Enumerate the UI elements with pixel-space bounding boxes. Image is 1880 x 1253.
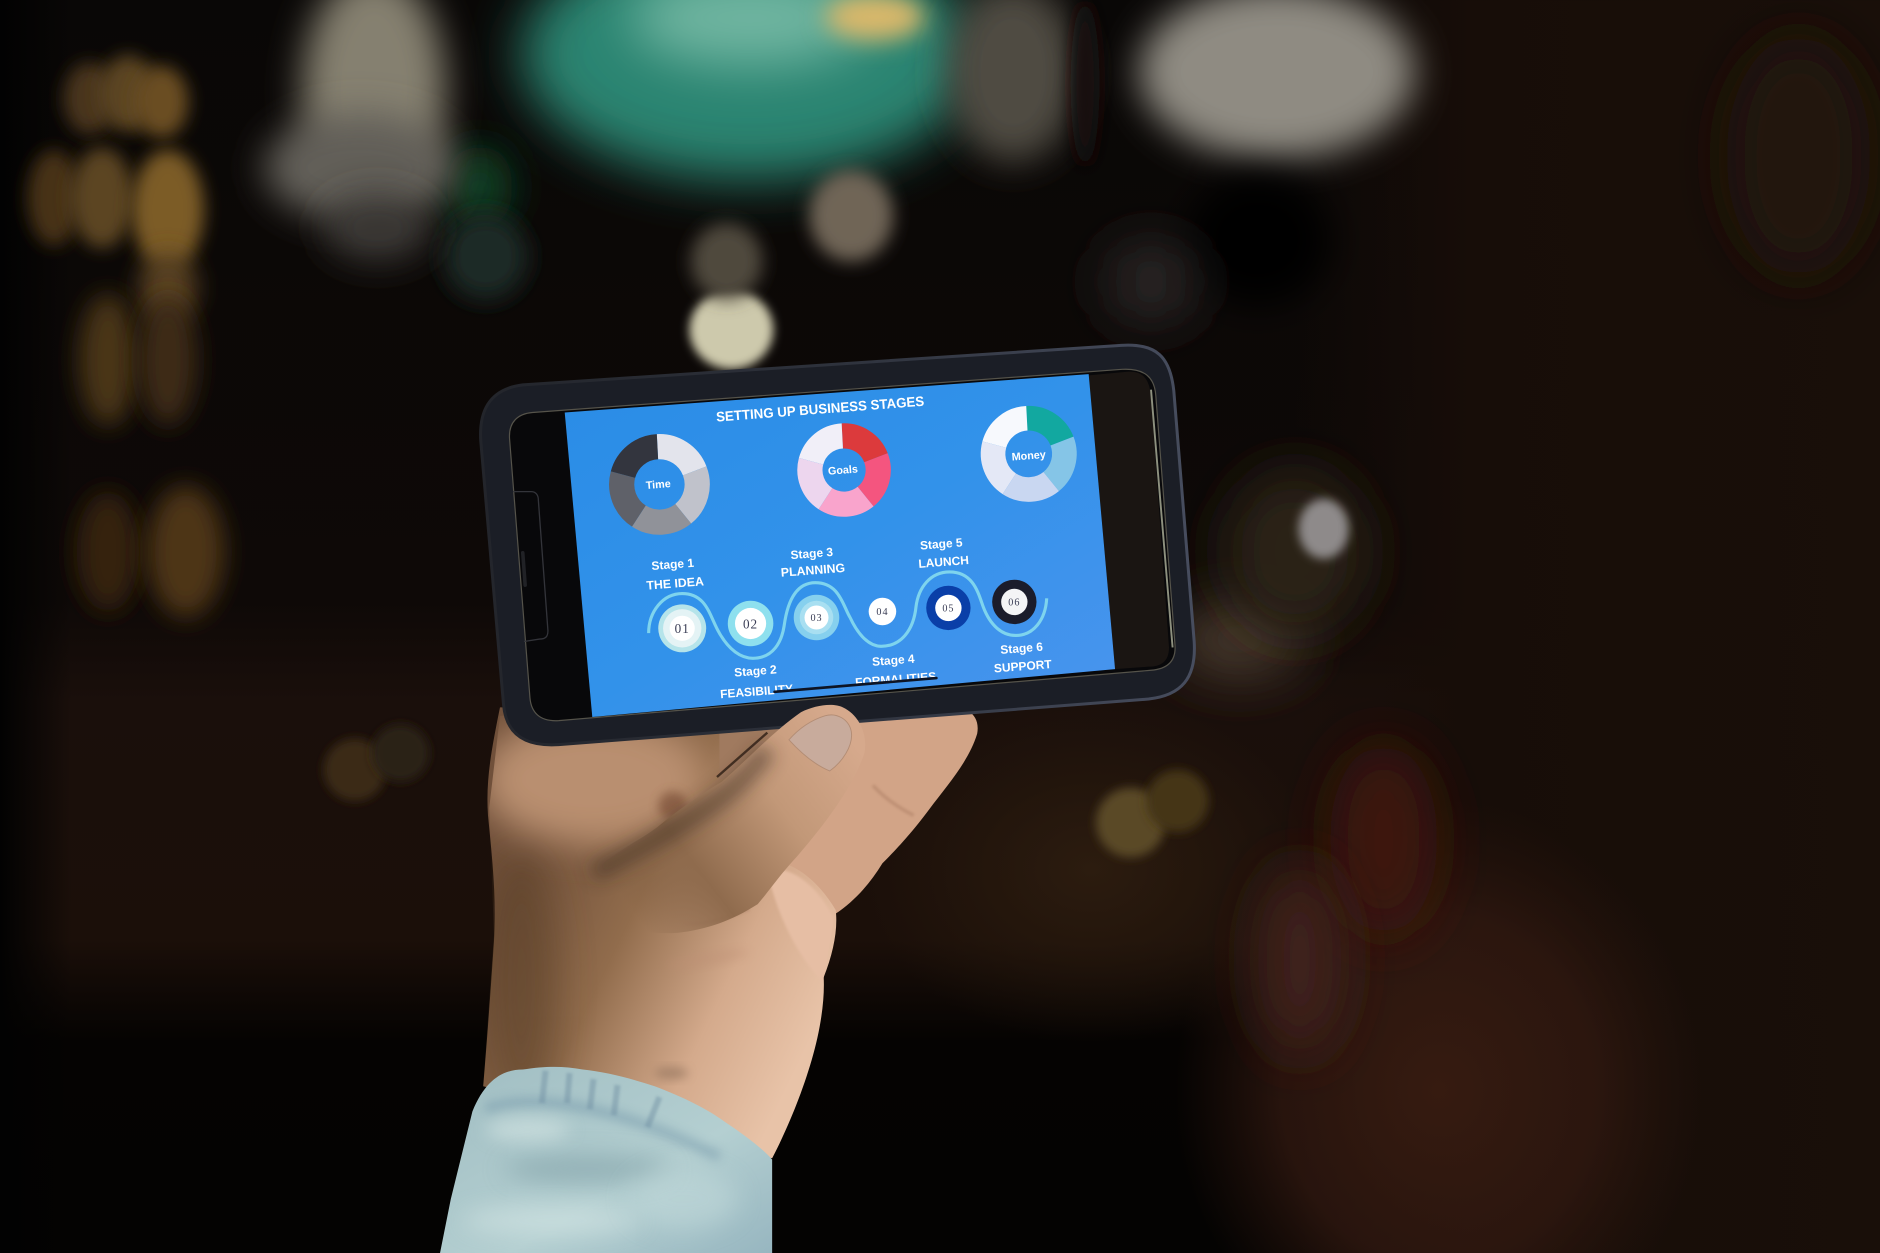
donut chart: time	[622, 447, 697, 522]
stage 01 marker	[658, 604, 706, 652]
label: stage 2: FEASIBILITY	[720, 682, 794, 701]
stage 02 marker	[728, 601, 773, 646]
label: stage 1	[646, 556, 704, 593]
donut chart: goals	[810, 436, 878, 504]
label: stage 5	[918, 535, 969, 571]
label: stage 4: Stage 4	[872, 652, 915, 669]
label: stage 4: FORMALITIES	[855, 669, 937, 690]
stage 05 marker: 05	[942, 604, 954, 615]
stage 05 marker	[926, 586, 971, 630]
phone case	[481, 345, 1194, 745]
label: stage 5: LAUNCH	[918, 553, 969, 571]
screen	[565, 374, 1115, 717]
phone glass	[509, 369, 1175, 721]
hand shading	[486, 716, 827, 1083]
stage 03 marker: 03	[810, 613, 823, 624]
stage 01 marker: 01	[675, 621, 690, 636]
right bezel	[1089, 372, 1169, 669]
background: bokeh lights	[28, 55, 1209, 857]
stage 03 marker	[794, 595, 839, 640]
stage 04 marker: 04	[876, 607, 889, 618]
stage 06 marker	[992, 580, 1037, 624]
label: stage 2: Stage 2	[734, 662, 778, 680]
timeline wave	[649, 572, 1047, 658]
label: stage 1: Stage 1	[651, 556, 695, 573]
label: stage 6	[993, 640, 1053, 675]
stage 04 marker	[869, 598, 896, 625]
background: globe	[444, 0, 977, 300]
label: stage 6: Stage 6	[1000, 640, 1044, 657]
label: stage 4	[856, 654, 936, 684]
background: pale blurred shapes	[264, 0, 1415, 559]
stage 06 marker: 06	[1008, 598, 1020, 609]
thumb fold crease	[717, 733, 767, 777]
donut chart: money: Money	[1011, 449, 1046, 464]
speaker slot	[523, 553, 525, 585]
label: stage 3	[780, 545, 846, 580]
hand	[480, 701, 978, 1158]
glass edge highlight	[1151, 390, 1173, 647]
finger joint crease	[873, 785, 914, 815]
donut chart: time: Time	[645, 478, 671, 492]
label: stage 6: SUPPORT	[993, 657, 1053, 675]
phone	[481, 345, 1194, 745]
palm	[483, 707, 836, 1158]
index and middle fingers	[767, 701, 978, 914]
notch outline	[513, 492, 548, 641]
label: stage 2	[720, 665, 792, 698]
denim cuff	[440, 1067, 772, 1253]
label: stage 5: Stage 5	[919, 535, 963, 553]
home indicator bar	[775, 678, 936, 692]
thumb top-edge shadow	[593, 749, 767, 873]
label: stage 3: Stage 3	[790, 545, 834, 562]
label: stage 3: PLANNING	[780, 561, 846, 580]
donut chart: money	[993, 418, 1064, 490]
thumb nail	[789, 715, 852, 771]
thumb over phone edge	[564, 705, 865, 933]
title: SETTING UP BUSINESS STAGES	[716, 394, 925, 425]
label: stage 1: THE IDEA	[646, 574, 704, 593]
stage 02 marker: 02	[743, 616, 758, 631]
donut chart: goals: Goals	[828, 463, 858, 478]
